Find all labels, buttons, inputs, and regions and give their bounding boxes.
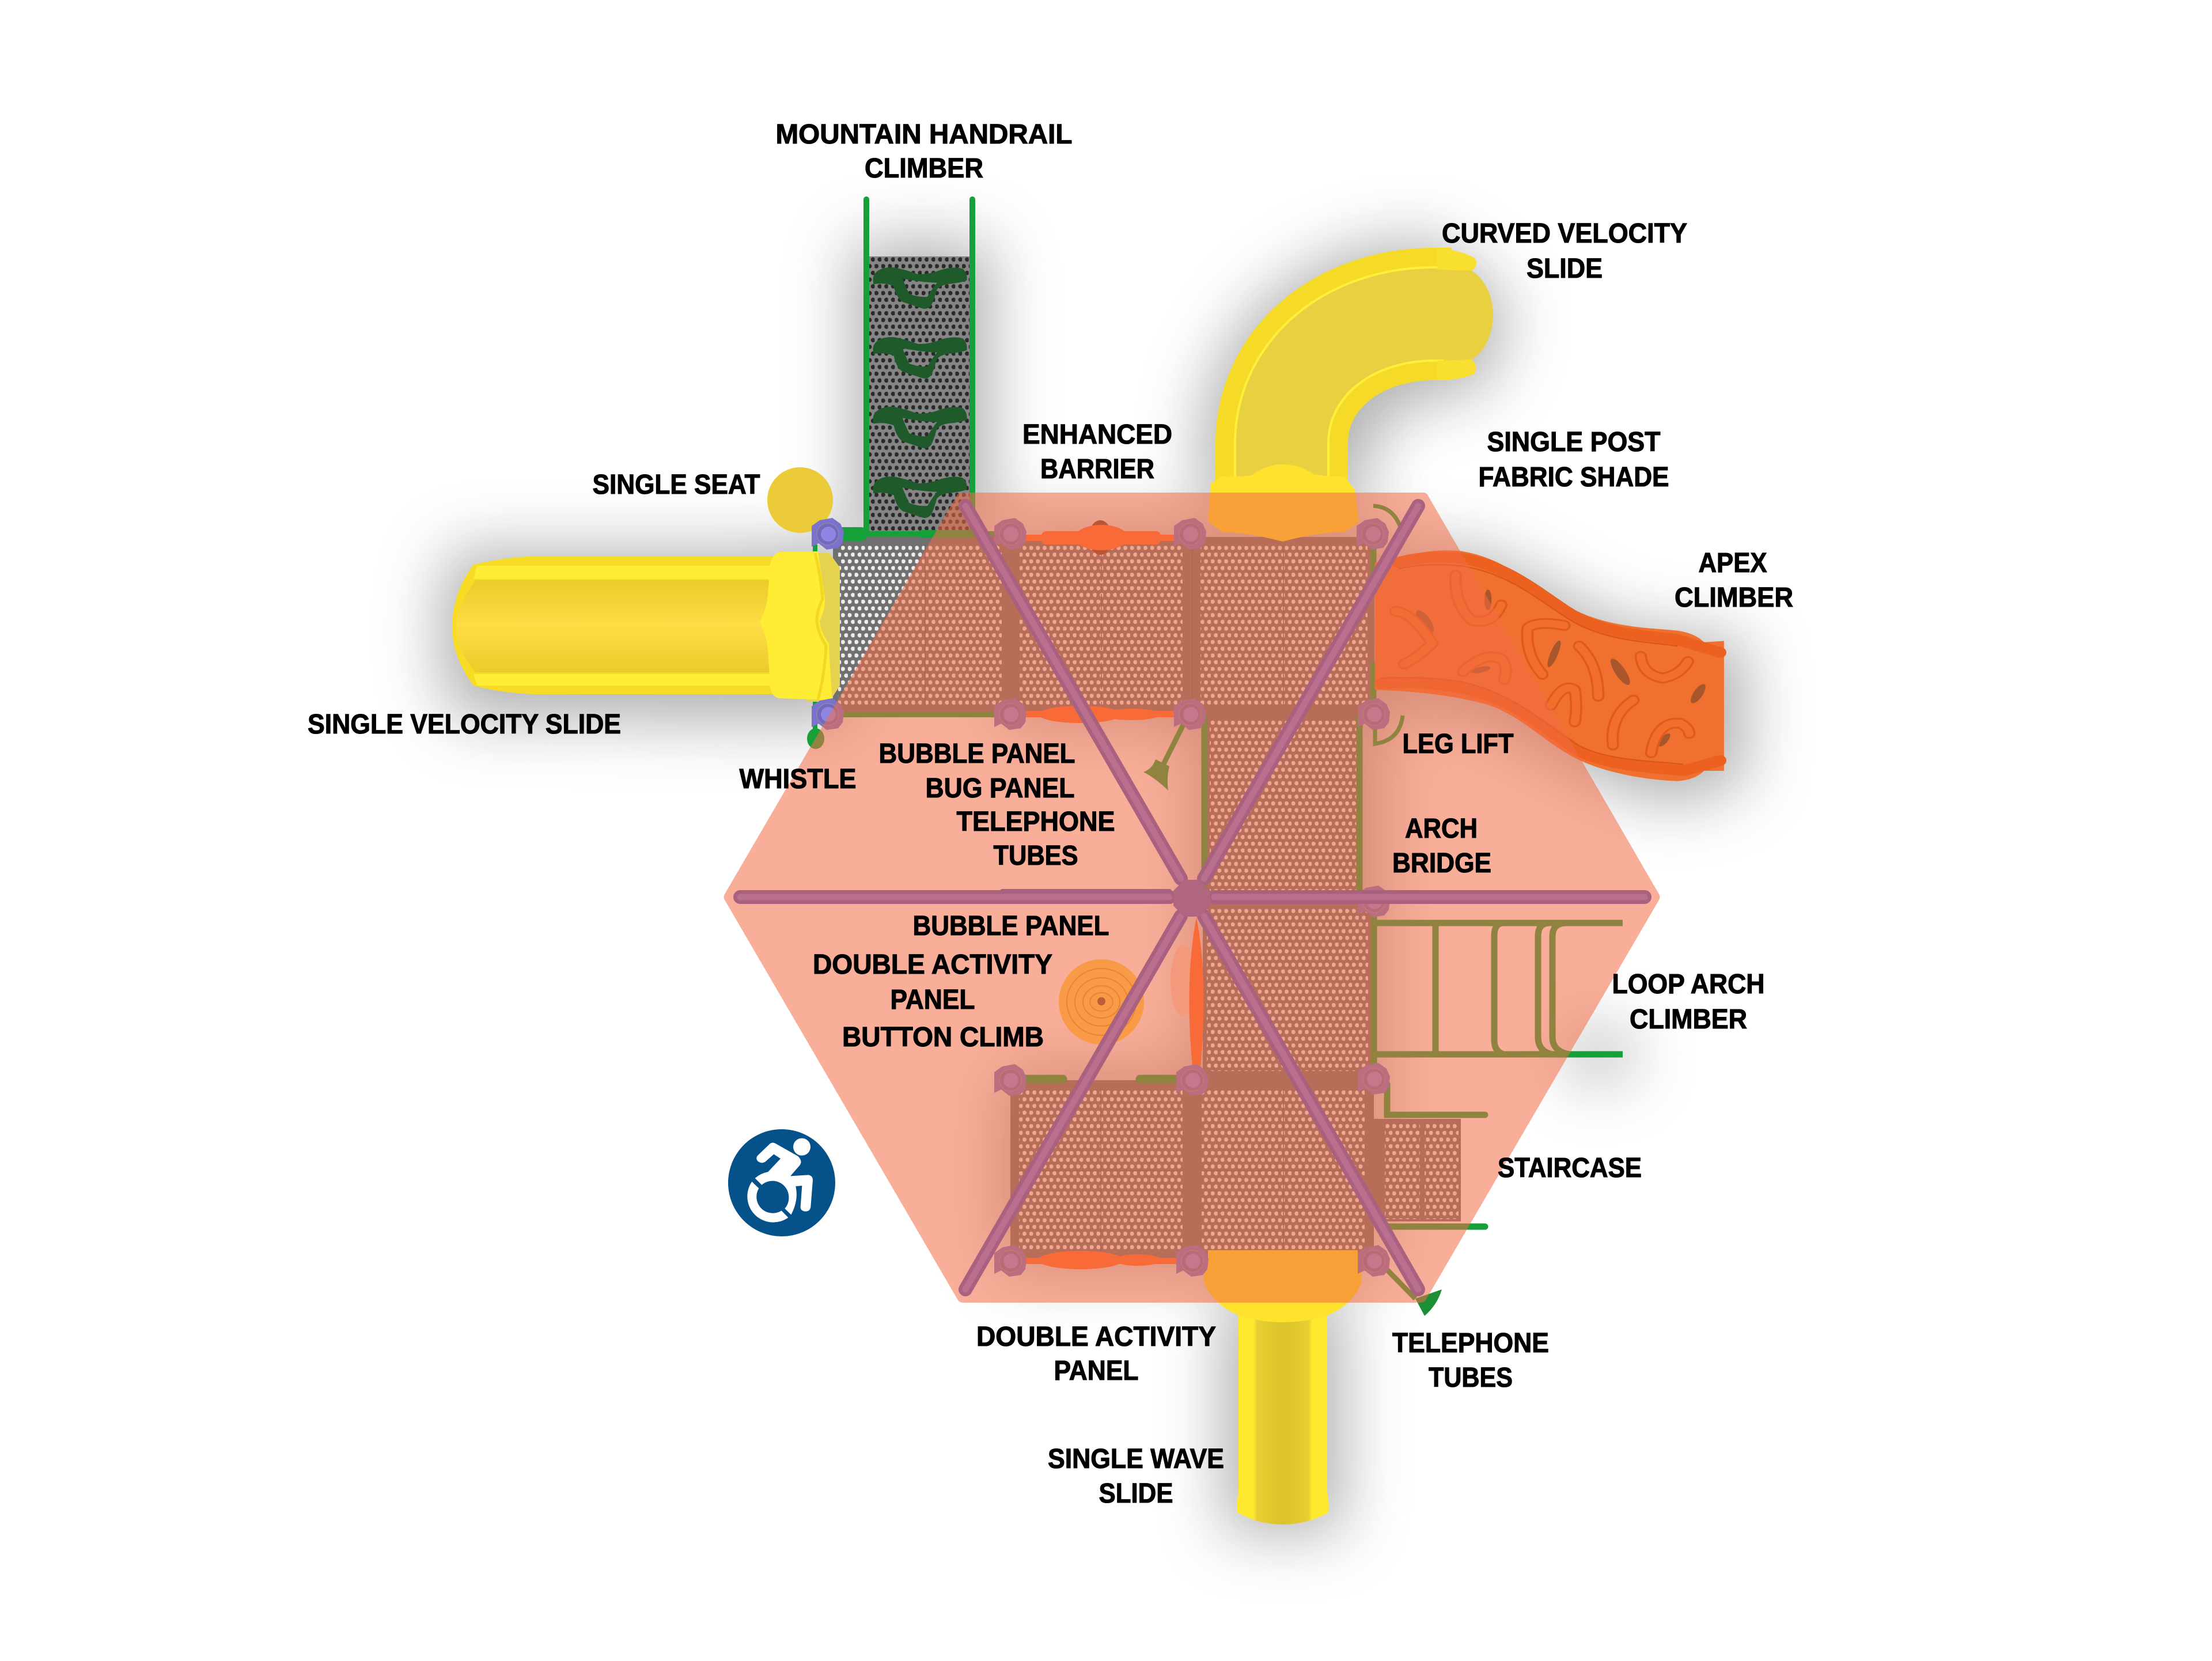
single seat [767, 467, 833, 533]
label: curved velocity slide: SLIDE [1527, 253, 1603, 284]
telephone tubes: lower [1387, 1270, 1442, 1316]
bubble and bug panels [1021, 706, 1180, 723]
label: apex climber: APEX [1698, 548, 1767, 578]
label: double activity panel lower [976, 1322, 1216, 1386]
label: bug panel: BUG PANEL [925, 773, 1075, 804]
label: enhanced barrier: ENHANCED [1022, 419, 1172, 450]
loop arch climber [1376, 923, 1623, 1054]
label: mountain handrail climber [775, 119, 1073, 184]
label: apex climber [1675, 548, 1793, 613]
label: double activity panel upper: PANEL [891, 985, 975, 1015]
label: loop arch climber: LOOP ARCH [1612, 969, 1765, 1000]
label: single wave slide: SLIDE [1099, 1478, 1173, 1509]
deck rails [815, 534, 1374, 1079]
label: arch bridge: BRIDGE [1392, 848, 1491, 879]
label: double activity panel lower: DOUBLE ACTIVITY [976, 1322, 1216, 1352]
label: double activity panel upper [813, 949, 1052, 1015]
apex climber [1375, 550, 1724, 781]
label: whistle: WHISTLE [740, 764, 856, 794]
label: double activity panel lower: PANEL [1054, 1356, 1138, 1386]
label: single post fabric shade [1478, 427, 1669, 493]
mountain handrail climber [863, 196, 975, 534]
label: mountain handrail climber: MOUNTAIN HANDRAIL [775, 119, 1073, 150]
label: telephone tubes upper [956, 807, 1115, 871]
leg lift [1373, 506, 1403, 744]
label: telephone tubes upper: TUBES [993, 841, 1078, 871]
label: apex climber: CLIMBER [1675, 582, 1793, 613]
curved slide flare [1208, 464, 1359, 542]
label: arch bridge [1392, 814, 1491, 879]
label: bubble panel lower: BUBBLE PANEL [912, 911, 1109, 941]
climber handholds [873, 267, 967, 518]
label: arch bridge: ARCH [1405, 814, 1478, 844]
bubble panel [1171, 945, 1196, 1016]
label: loop arch climber [1612, 969, 1765, 1035]
double activity panel: bottom [1022, 1251, 1187, 1269]
enhanced barrier [1021, 520, 1180, 555]
label: staircase: STAIRCASE [1498, 1153, 1642, 1183]
climber panel [869, 256, 969, 534]
single post fabric shade [724, 493, 1660, 1303]
curved velocity slide [1208, 249, 1493, 542]
label: telephone tubes lower: TUBES [1429, 1363, 1513, 1393]
label: single velocity slide: SINGLE VELOCITY SLIDE [308, 709, 621, 740]
label: double activity panel upper: DOUBLE ACTIVITY [813, 949, 1052, 980]
label: single wave slide [1048, 1444, 1224, 1509]
label: loop arch climber: CLIMBER [1630, 1004, 1747, 1035]
shade frame poles [740, 506, 1645, 1289]
label: single post fabric shade: SINGLE POST [1487, 427, 1660, 457]
climber side rails [863, 196, 975, 534]
single wave slide [1204, 1250, 1362, 1524]
label: enhanced barrier: BARRIER [1040, 454, 1154, 485]
label: telephone tubes lower: TELEPHONE [1392, 1328, 1549, 1359]
label: single post fabric shade: FABRIC SHADE [1478, 462, 1669, 493]
wave slide flare [1204, 1250, 1362, 1322]
whistle [807, 728, 824, 749]
button climb [1059, 959, 1144, 1045]
label: enhanced barrier [1022, 419, 1172, 485]
perforated decks [833, 537, 1374, 1261]
label: curved velocity slide [1442, 218, 1687, 284]
staircase [1374, 1084, 1485, 1227]
label: mountain handrail climber: CLIMBER [865, 153, 983, 184]
label: curved velocity slide: CURVED VELOCITY [1442, 218, 1687, 249]
posts [812, 518, 1390, 1277]
label: bubble panel: BUBBLE PANEL [879, 739, 1075, 769]
telephone tubes: upper [1143, 720, 1185, 790]
label: leg lift: LEG LIFT [1402, 729, 1514, 759]
label: telephone tubes upper: TELEPHONE [956, 807, 1115, 837]
label: single seat: SINGLE SEAT [592, 470, 760, 500]
double activity panel: vertical [1189, 917, 1204, 1067]
accessibility icon [728, 1129, 835, 1236]
single velocity slide [452, 551, 840, 702]
label: telephone tubes lower [1392, 1328, 1549, 1393]
shade center hub [1173, 880, 1210, 917]
label: button climb: BUTTON CLIMB [842, 1022, 1044, 1053]
label: single wave slide: SINGLE WAVE [1048, 1444, 1224, 1474]
soft ground shadows [449, 253, 1734, 1521]
